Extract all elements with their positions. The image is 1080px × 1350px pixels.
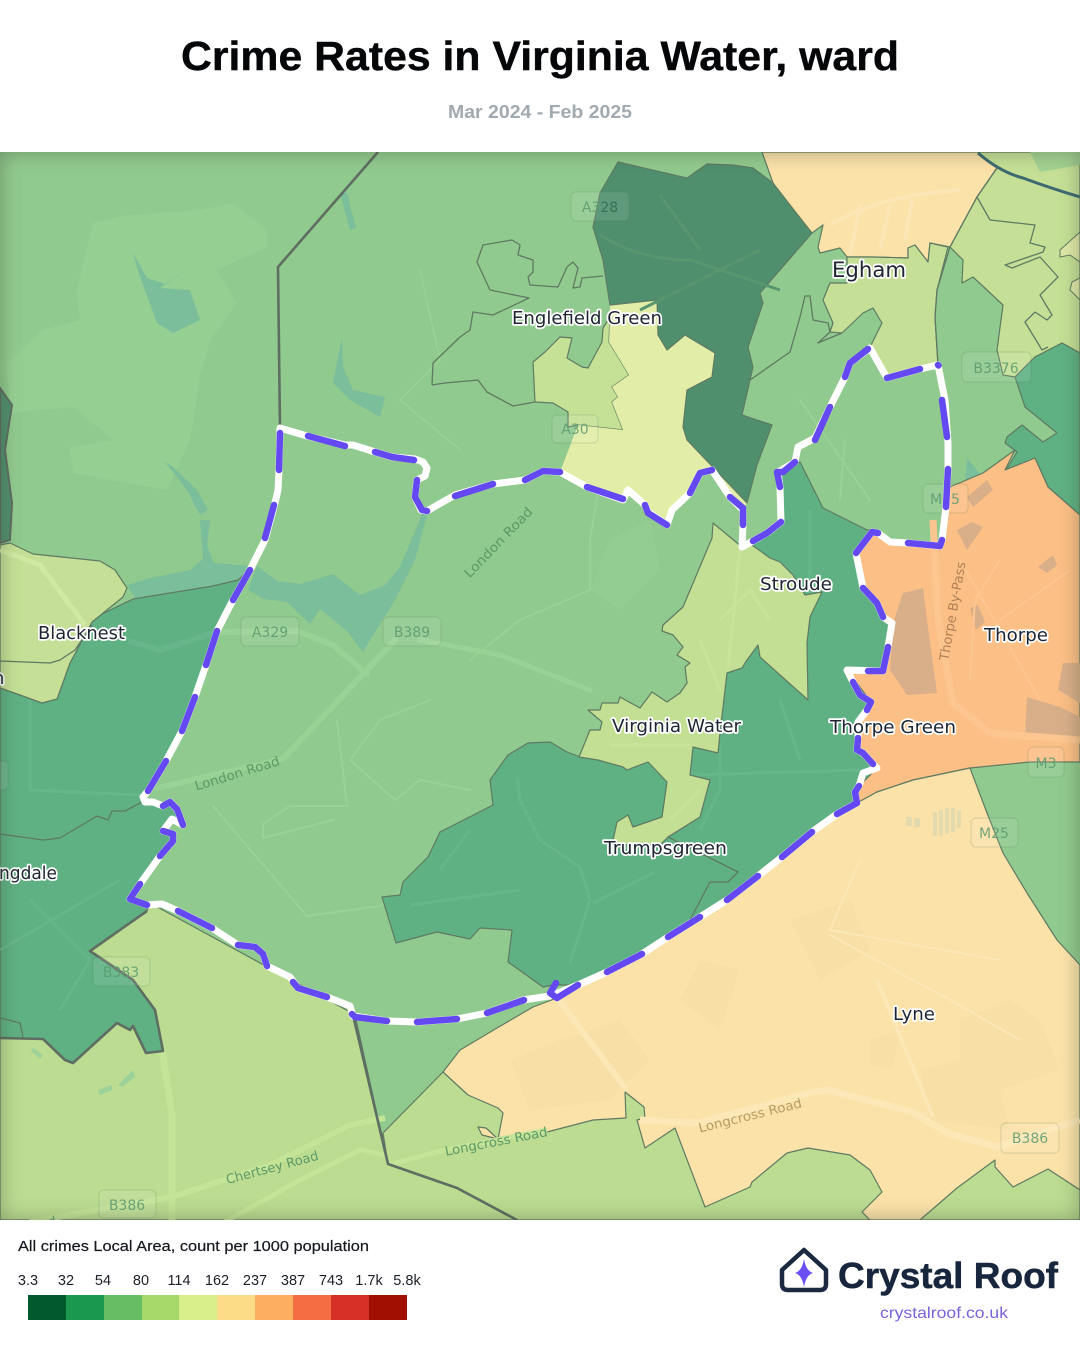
- legend scale values: 387: [281, 1273, 305, 1289]
- legend scale values: 162: [205, 1273, 229, 1289]
- road name labels: ad: [39, 1214, 58, 1232]
- road number shields: M25: [930, 492, 960, 508]
- place name labels: Thorpe: [983, 625, 1048, 646]
- Englefield Green light polygon: [533, 317, 629, 430]
- road number shields: A30: [561, 422, 589, 438]
- road number shields: A329: [252, 625, 288, 641]
- north-east lime polygon: [950, 152, 1080, 377]
- deep green: Trumpsgreen and Thorpe Green: [382, 462, 892, 987]
- legend scale values: 1.7k: [355, 1273, 383, 1289]
- inner outline: Englefield Green area: [432, 240, 603, 406]
- north-east inner outline: [977, 197, 1058, 350]
- place name labels: [0, 258, 1048, 1025]
- dark green polygon north of Virginia Water: [593, 162, 812, 503]
- south-west lime roads: [30, 1050, 547, 1222]
- legend scale values: 3.3: [18, 1273, 38, 1289]
- legend heading: All crimes Local Area, count per 1000 population: [18, 1239, 369, 1255]
- Egham lime polygon: [823, 243, 948, 377]
- dark polygon road texture: [639, 284, 780, 312]
- website link: crystalroof.co.uk: [880, 1305, 1009, 1322]
- subtitle: date range: Mar 2024 - Feb 2025: [448, 102, 632, 122]
- road number shields: B386: [109, 1198, 145, 1214]
- Egham street lighter lines: [830, 190, 960, 255]
- road name labels: Longcross Road: [444, 1125, 549, 1160]
- map edge vignette: [0, 152, 1080, 1220]
- road number shields: B383: [103, 965, 139, 981]
- Virginia Water light roads: [610, 550, 770, 820]
- Lyne darker land patches: [510, 900, 1060, 1130]
- Blacknest lime polygon: [0, 543, 127, 703]
- place name labels: Trumpsgreen: [603, 838, 727, 859]
- ward boundary: purple dashes: [130, 349, 948, 1022]
- place name labels: ngdale: [0, 863, 57, 884]
- legend scale values: 80: [133, 1273, 149, 1289]
- river Thames: [978, 153, 1080, 197]
- place name labels: Englefield Green: [512, 308, 662, 329]
- Thorpe local roads: [960, 560, 1070, 700]
- place name labels: Virginia Water: [612, 716, 742, 737]
- title: Crime Rates in Virginia Water, ward: [181, 33, 899, 79]
- north-east pale pockets: [1060, 232, 1080, 300]
- place name labels: Thorpe Green: [829, 717, 956, 738]
- road number shields: [0, 192, 1064, 1218]
- Thorpe orange polygon: [847, 450, 1080, 803]
- legend scale values: 237: [243, 1273, 267, 1289]
- legend colour bar: [28, 1295, 407, 1320]
- road name labels: Longcross Road: [697, 1096, 804, 1137]
- roads on the central green area: [123, 270, 870, 916]
- Thorpe By-Pass road: [933, 520, 1080, 740]
- legend scale values: 114: [167, 1273, 191, 1289]
- road name labels: London Road: [462, 505, 536, 581]
- north-east deep green polygon: [1005, 343, 1080, 515]
- Egham inner arc line: [935, 168, 997, 365]
- place name labels: Blacknest: [38, 623, 125, 644]
- place name labels: Egham: [832, 258, 906, 282]
- Blacknest inner outline: [0, 625, 92, 663]
- road number shields: B3376: [973, 361, 1019, 377]
- legend scale values: 32: [58, 1273, 74, 1289]
- legend scale values: [18, 1273, 421, 1289]
- Lyne islet: [478, 1127, 498, 1139]
- deep green inner outline: [668, 817, 738, 920]
- Lyne roads: [557, 860, 1080, 1147]
- Egham inner outline: [750, 296, 842, 380]
- Virginia Water lime polygon: [579, 523, 822, 845]
- road number shields: A328: [582, 200, 618, 216]
- Thorpe brown patches: [890, 480, 1080, 740]
- left edge dark polygon: [0, 388, 12, 543]
- icon: house with star: [782, 1250, 826, 1290]
- road number shields: M3: [1036, 756, 1056, 772]
- south-west roads and inner outlines: [0, 948, 1, 951]
- road number shields: M25: [979, 826, 1009, 842]
- Egham pale orange polygon: [762, 152, 997, 262]
- logo wordmark: Crystal Roof: [838, 1255, 1059, 1296]
- water: lakes and streams: [127, 193, 980, 652]
- place name labels: Lyne: [893, 1004, 935, 1025]
- logo: Crystal Roof: [782, 1250, 1059, 1322]
- place name labels: Stroude: [760, 574, 832, 595]
- ward boundary: white outline: [130, 348, 948, 1022]
- legend scale values: 743: [319, 1273, 343, 1289]
- road name labels: Thorpe By-Pass: [937, 560, 970, 663]
- road number shields: B389: [394, 625, 430, 641]
- road name labels: Chertsey Road: [225, 1149, 320, 1188]
- Lyne pale orange polygon: [443, 768, 1080, 1220]
- road name labels: [39, 505, 970, 1232]
- road number shields: B386: [1012, 1131, 1048, 1147]
- Englefield Green pale yellow polygon: [560, 300, 747, 525]
- Lyne solar farm: [906, 808, 961, 836]
- legend: [18, 1239, 421, 1320]
- legend scale values: 5.8k: [393, 1273, 421, 1289]
- south-west lime polygon: [0, 903, 517, 1220]
- road name labels: London Road: [193, 754, 282, 794]
- river-side teal patches: [1030, 152, 1080, 172]
- south lime polygon: [383, 1072, 1080, 1220]
- south-west lime ponds: [31, 1048, 135, 1095]
- woodland light patches: [7, 203, 660, 610]
- south-west deep green polygon: [0, 570, 250, 1063]
- deep green roads: [410, 510, 860, 963]
- Blacknest road: [0, 550, 85, 625]
- thick district boundary lines: [0, 152, 517, 1220]
- legend scale values: 54: [95, 1273, 111, 1289]
